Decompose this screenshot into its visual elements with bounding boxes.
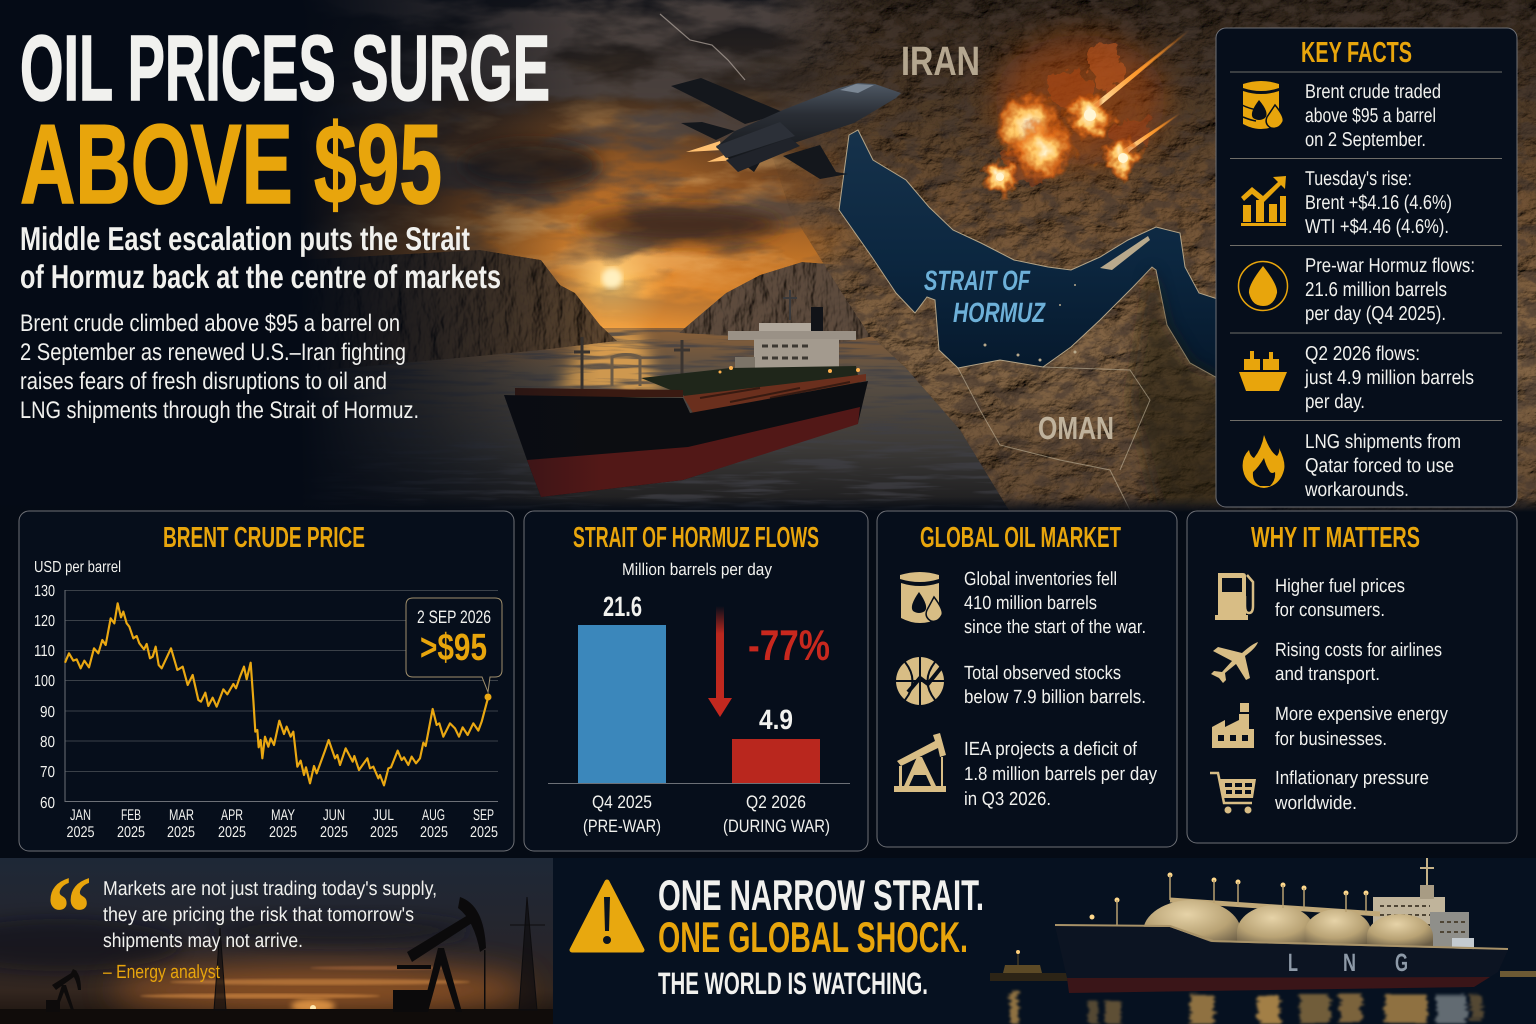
subtitle: of Hormuz back at the centre of markets	[20, 258, 501, 295]
quote text	[103, 878, 437, 952]
persian gulf water	[839, 130, 1230, 385]
fact text: Q2 flows: just 4.9 million barrels	[1304, 367, 1474, 389]
text: energy: More expensive energy	[1275, 704, 1448, 725]
fact text: Tuesday rise: WTI +$4.46 (4.6%).	[1305, 216, 1449, 238]
x axis labels: SEP	[473, 807, 494, 824]
fact text: LNG workarounds: Qatar forced to use	[1305, 455, 1454, 477]
x axis labels: MAY	[271, 807, 295, 824]
icon: flame	[1243, 435, 1284, 488]
x axis labels: AUG	[422, 807, 445, 824]
y axis labels: 110	[34, 643, 55, 660]
icon: rising chart	[1241, 176, 1286, 226]
quote text: Markets are not just trading today's supply,	[103, 878, 437, 900]
intro paragraph: LNG shipments through the Strait of Hormuz.	[20, 397, 419, 424]
subtitle	[20, 220, 501, 295]
y axis labels: 130	[34, 583, 55, 600]
text: observed stocks: below 7.9 billion barrels.	[964, 687, 1146, 708]
callout: 2 Sep 2026 above 95: 2 SEP 2026	[417, 607, 491, 627]
explosions and missiles	[980, 28, 1192, 197]
x axis labels: 2025	[470, 824, 498, 841]
panel: analyst quote over oilfield sunset	[0, 854, 553, 1024]
water reflections	[1010, 992, 1482, 1024]
fact text: Brent above 95: above $95 a barrel	[1305, 105, 1436, 127]
axis title: USD per barrel	[34, 559, 121, 576]
quote text: they are pricing the risk that tomorrow's	[103, 904, 414, 926]
subtitle: Middle East escalation puts the Strait	[20, 220, 470, 257]
line chart	[34, 583, 498, 841]
pumpjack silhouette small	[46, 969, 81, 1012]
text: fuel prices: Higher fuel prices	[1275, 576, 1405, 597]
pylons	[214, 897, 545, 1010]
headline: one narrow strait: ONE NARROW STRAIT.	[658, 872, 984, 920]
intro paragraph: raises fears of fresh disruptions to oil and	[20, 368, 387, 395]
y axis labels: 70	[40, 764, 55, 781]
icon: oil drop in circle	[1238, 262, 1288, 310]
text: inflation	[1274, 768, 1429, 814]
icon: shopping cart	[1210, 773, 1256, 814]
text: airlines	[1275, 640, 1442, 685]
fact text: Tuesday rise: Brent +$4.16 (4.6%)	[1305, 192, 1452, 214]
text: airlines: and transport.	[1275, 664, 1380, 685]
text: energy	[1275, 704, 1448, 750]
pumpjack silhouette large	[393, 897, 486, 1012]
text: IEA deficit	[964, 739, 1157, 810]
icon: factory	[1212, 703, 1254, 748]
intro paragraph	[20, 310, 419, 424]
icon: pumpjack	[894, 733, 946, 792]
text: inventories: Global inventories fell	[964, 569, 1117, 590]
fact text: Q2 flows	[1304, 343, 1474, 413]
text: IEA deficit: 1.8 million barrels per day	[964, 764, 1157, 785]
bar: Q4 2025: (PRE-WAR)	[583, 816, 661, 836]
map label: Strait of Hormuz: STRAIT OF	[924, 265, 1031, 296]
panel: why it matters	[1187, 511, 1517, 843]
heading: why it matters: WHY IT MATTERS	[1251, 522, 1420, 554]
callout: 2 Sep 2026 above 95: >$95	[420, 627, 487, 669]
x axis labels: 2025	[117, 824, 145, 841]
oman peninsula relief	[1130, 267, 1230, 512]
text: airlines: Rising costs for airlines	[1275, 640, 1442, 661]
heading: Strait of Hormuz flows: STRAIT OF HORMUZ FLOWS	[573, 522, 819, 554]
icon: barrel	[900, 572, 942, 623]
text: inflation: Inflationary pressure	[1275, 768, 1429, 789]
y axis labels: 120	[34, 613, 55, 630]
x axis labels: 2025	[218, 824, 246, 841]
panel: key facts	[1216, 28, 1517, 507]
y axis labels	[34, 583, 55, 812]
main title: OIL PRICES SURGE	[20, 16, 550, 120]
icon: fuel pump	[1215, 573, 1253, 620]
bar: Q4 2025: Q4 2025	[592, 792, 652, 812]
x axis labels: MAR	[169, 807, 194, 824]
hull lettering: N	[1343, 949, 1356, 977]
bar: Q2 2026: (DURING WAR)	[723, 816, 830, 836]
gulf islands and coast lights	[984, 236, 1150, 362]
bar: Q2 2026	[723, 704, 830, 836]
map label: Strait of Hormuz	[924, 270, 1046, 322]
bottom banner background	[553, 858, 1536, 1024]
oil tanker	[504, 290, 868, 497]
map land	[760, 0, 1536, 512]
map label: Oman: OMAN	[1038, 410, 1114, 446]
x axis labels: 2025	[370, 824, 398, 841]
callout: 2 Sep 2026 above 95	[406, 598, 502, 692]
map border lines	[958, 367, 1150, 510]
panel: Strait of Hormuz flows	[524, 511, 868, 851]
main title: ABOVE $95	[20, 101, 442, 227]
text: observed stocks: Total observed stocks	[964, 663, 1121, 684]
x axis labels	[66, 807, 498, 841]
illustration: LNG carrier at night	[990, 858, 1536, 1024]
LNG tank domes	[1090, 872, 1433, 948]
bottom fade	[374, 498, 1536, 512]
text: IEA deficit: in Q3 2026.	[964, 789, 1051, 810]
main title	[20, 16, 550, 227]
hull lettering: G	[1395, 949, 1408, 977]
headline: one narrow strait: ONE GLOBAL SHOCK.	[658, 914, 968, 962]
arrow: decline	[708, 606, 732, 717]
headline: one narrow strait: THE WORLD IS WATCHING.	[658, 966, 928, 1001]
bar: Q4 2025	[578, 591, 666, 836]
fact text: LNG workarounds	[1304, 431, 1461, 501]
sea water	[330, 328, 1008, 510]
distant lights right	[1500, 971, 1536, 977]
price line	[65, 603, 488, 785]
fact text: pre-war flows	[1305, 255, 1475, 325]
icon: cargo ship	[1239, 351, 1287, 391]
x axis labels: 2025	[320, 824, 348, 841]
lightning	[660, 14, 745, 80]
fact text: Brent above 95: on 2 September.	[1305, 129, 1426, 151]
fact text: Tuesday rise: Tuesday's rise:	[1305, 168, 1412, 190]
fact text: LNG workarounds: workarounds.	[1304, 479, 1409, 501]
LNG carrier hull	[1055, 925, 1508, 993]
fact text: Brent above 95: Brent crude traded	[1305, 81, 1441, 103]
x axis labels: 2025	[269, 824, 297, 841]
fact text: pre-war flows: Pre-war Hormuz flows:	[1305, 255, 1475, 277]
map label: Iran: IRAN	[901, 38, 980, 84]
map label: Strait of Hormuz: HORMUZ	[953, 297, 1046, 328]
hull lettering	[1288, 949, 1408, 977]
heading: key facts: KEY FACTS	[1301, 37, 1412, 69]
x axis labels: 2025	[420, 824, 448, 841]
icon: warning triangle	[572, 882, 642, 950]
y axis labels: 100	[34, 673, 55, 690]
bar chart	[548, 591, 850, 836]
x axis labels: 2025	[66, 824, 94, 841]
fact text: LNG workarounds: LNG shipments from	[1305, 431, 1461, 453]
text: inventories: 410 million barrels	[964, 593, 1097, 614]
quote text: shipments may not arrive.	[103, 930, 303, 952]
fact text: Q2 flows: per day.	[1305, 391, 1365, 413]
x axis labels: JUL	[373, 807, 394, 824]
icon: globe with chart	[896, 657, 944, 705]
bar: Q2 2026: 4.9	[759, 704, 793, 735]
unit subtitle: Million barrels per day	[622, 560, 772, 579]
fact text: pre-war flows: per day (Q4 2025).	[1305, 303, 1446, 325]
x axis labels: 2025	[167, 824, 195, 841]
fighter jet	[671, 78, 901, 179]
x axis labels: FEB	[121, 807, 141, 824]
ship superstructure	[1373, 858, 1474, 950]
bar: Q2 2026: Q2 2026	[746, 792, 806, 812]
panel: Brent crude price chart	[19, 511, 514, 851]
distant vessel	[990, 950, 1068, 981]
end point marker	[484, 694, 492, 700]
y axis labels: 60	[40, 795, 55, 812]
text: observed stocks	[964, 663, 1146, 708]
text: fuel prices: for consumers.	[1275, 600, 1385, 621]
fact text: Q2 flows: Q2 2026 flows:	[1305, 343, 1420, 365]
headline: one narrow strait	[658, 872, 984, 1001]
x axis labels: JUN	[323, 807, 345, 824]
y axis labels: 90	[40, 704, 55, 721]
quote mark: “	[46, 854, 92, 971]
hero scene: sunset strait, map, jet and tanker	[314, 0, 1536, 510]
fact text: pre-war flows: 21.6 million barrels	[1305, 279, 1447, 301]
heading: Brent crude price: BRENT CRUDE PRICE	[163, 522, 365, 554]
text: inflation: worldwide.	[1274, 793, 1357, 814]
icon: airplane	[1211, 642, 1258, 683]
x axis labels: JAN	[70, 807, 91, 824]
right cliff	[680, 262, 872, 342]
sunset sky	[314, 0, 856, 328]
text: fuel prices	[1275, 576, 1405, 621]
hull lettering: L	[1288, 949, 1298, 977]
text: IEA deficit: IEA projects a deficit of	[964, 739, 1138, 760]
left cliff	[318, 250, 617, 366]
intro paragraph: 2 September as renewed U.S.–Iran fighting	[20, 339, 406, 366]
text: inventories: since the start of the war.	[964, 617, 1146, 638]
icon: oil barrel with drop	[1242, 81, 1283, 129]
fact text: Tuesday rise	[1305, 168, 1452, 238]
y axis labels: 80	[40, 734, 55, 751]
text: inventories	[964, 569, 1146, 638]
bar: Q4 2025: 21.6	[603, 591, 642, 622]
left dark gradient	[260, 0, 590, 507]
panel: global oil market	[877, 511, 1177, 847]
heading: global oil market: GLOBAL OIL MARKET	[920, 522, 1121, 554]
fact text: Brent above 95	[1305, 81, 1441, 151]
text: energy: for businesses.	[1275, 729, 1387, 750]
intro paragraph: Brent crude climbed above $95 a barrel on	[20, 310, 400, 337]
callout: minus 77 percent: -77%	[748, 622, 830, 670]
x axis labels: APR	[221, 807, 243, 824]
quote attribution: – Energy analyst	[103, 962, 221, 983]
